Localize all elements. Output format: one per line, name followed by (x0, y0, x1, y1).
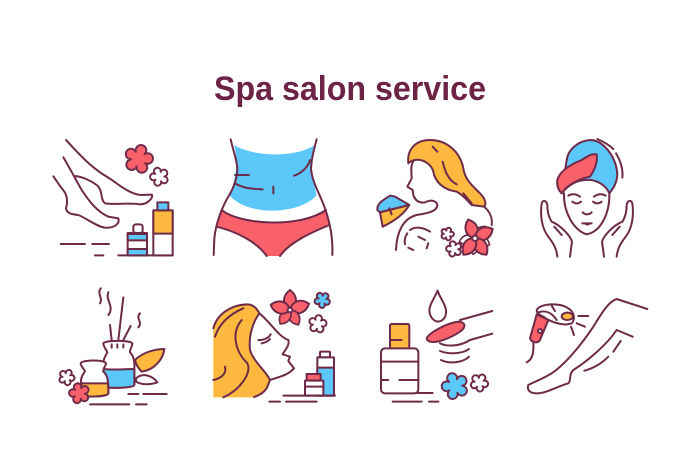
icon: peeling bottle and drop (381, 291, 492, 402)
icon: woman with back brush (377, 140, 495, 258)
icon: woman smelling aroma (213, 289, 335, 402)
icon: feet with flowers and bottles (53, 140, 173, 255)
icon: face care with towel (541, 139, 633, 257)
icon: laser hair removal on leg (527, 299, 647, 393)
flower (269, 290, 311, 327)
icon: waist and body wrap (214, 139, 332, 256)
title: Spa salon service (214, 70, 486, 108)
icon: aroma diffuser (57, 288, 167, 405)
flower (458, 217, 495, 258)
